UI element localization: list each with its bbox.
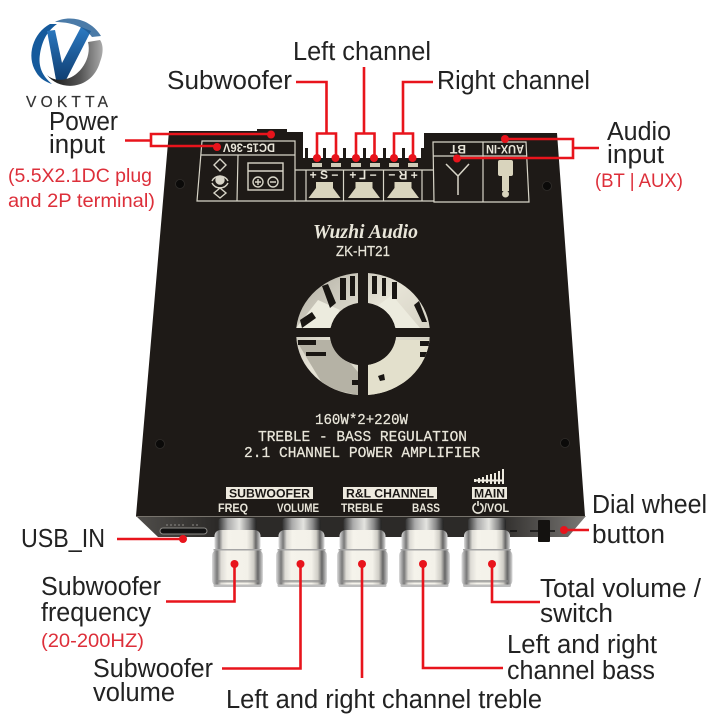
label: switch: switch — [540, 600, 613, 628]
callout: treble — [226, 560, 542, 714]
terminal comb — [305, 148, 424, 160]
callout: subwoofer volume — [93, 560, 304, 707]
knob: subwoofer volume — [276, 518, 327, 587]
board side — [136, 516, 586, 537]
AUX label: AUX-IN — [486, 142, 524, 156]
logo wordmark: VOKTTA — [26, 94, 109, 111]
icon: 2P terminal — [248, 163, 283, 190]
panel: audio input frame — [433, 142, 529, 202]
regulation text: TREBLE - BASS REGULATION — [258, 429, 467, 446]
label: volume: volume — [93, 679, 175, 707]
subwoofer terminal label: + S − — [310, 168, 338, 182]
note: plug spec: (5.5X2.1DC plug — [8, 165, 152, 187]
logo: VOKTTA — [26, 19, 109, 111]
callout: power input — [8, 108, 275, 212]
callout: dial wheel — [560, 491, 707, 549]
USB port — [160, 525, 207, 534]
left terminal label: + ⅃ − — [349, 168, 377, 182]
power label: DC15-36V — [223, 140, 275, 154]
callout: audio input — [453, 118, 683, 192]
right terminal label: + R − — [388, 168, 418, 182]
label: input: input — [607, 141, 664, 169]
icon: speaker S — [308, 182, 340, 198]
label: button: button — [592, 521, 665, 549]
label: audio: Audio — [607, 118, 671, 146]
board face — [136, 129, 585, 516]
label: subwoofer: Subwoofer — [41, 573, 161, 601]
TREBLE label: TREBLE — [341, 501, 383, 515]
FREQ label: FREQ — [218, 501, 248, 515]
knob: bass — [399, 518, 450, 587]
R&L channel tag: R&L CHANNEL — [346, 488, 434, 500]
BT label: BT — [449, 142, 466, 156]
callout: subwoofer — [167, 67, 340, 162]
callout: bass — [419, 560, 657, 685]
subwoofer tag: SUBWOOFER — [229, 488, 311, 500]
slots and dial wheel — [510, 520, 555, 542]
icon: DC jack — [212, 159, 228, 198]
callout: USB input: USB_IN — [21, 525, 105, 553]
VOL label — [473, 501, 509, 515]
callout: total volume — [488, 560, 702, 628]
callout: subwoofer frequency — [41, 560, 238, 652]
callout: subwoofer: Subwoofer — [167, 67, 293, 95]
icon: antenna — [446, 164, 469, 195]
callout: USB input — [21, 525, 187, 553]
callout: left channel — [293, 38, 431, 162]
panel: speaker output frame — [295, 168, 434, 201]
callout: right channel — [390, 67, 590, 162]
BASS label: BASS — [412, 501, 440, 515]
main tag: MAIN — [474, 488, 505, 500]
panel: power printed frame — [197, 140, 295, 201]
knob: main volume — [462, 518, 512, 587]
knob: subwoofer frequency — [212, 518, 263, 587]
note: terminal spec: and 2P terminal) — [8, 190, 155, 212]
label: dial wheel: Dial wheel — [592, 491, 707, 519]
label: power: Power — [49, 108, 118, 136]
power rating text: 160W*2+220W — [315, 412, 408, 429]
VOLUME label: VOLUME — [277, 501, 319, 515]
terminal pads — [312, 163, 418, 167]
label: subwoofer: Subwoofer — [93, 655, 213, 683]
callout: treble: Left and right channel treble — [226, 686, 542, 714]
brand script: Wuzhi Audio — [313, 221, 418, 243]
fan window — [296, 273, 430, 395]
icon: speaker R — [387, 182, 419, 198]
icon: volume bars — [474, 469, 504, 484]
label: left and right: Left and right — [507, 631, 657, 659]
channel text: 2.1 CHANNEL POWER AMPLIFIER — [244, 445, 480, 462]
knob: treble — [337, 518, 388, 587]
callout: left channel: Left channel — [293, 38, 431, 66]
label: input: input — [49, 131, 105, 159]
amplifier board — [136, 129, 586, 542]
screws — [156, 180, 570, 448]
callout: right channel: Right channel — [437, 67, 590, 95]
VOL label: /VOL — [484, 501, 509, 515]
icon: audio jack — [498, 160, 513, 198]
note: BT or AUX: (BT | AUX) — [595, 170, 683, 192]
icon: speaker L — [348, 182, 380, 198]
label: channel bass: channel bass — [507, 657, 655, 685]
model number: ZK-HT21 — [336, 244, 390, 260]
note: frequency range: (20-200HZ) — [41, 630, 144, 652]
label: total volume: Total volume / — [540, 575, 702, 603]
label: frequency: frequency — [41, 599, 151, 627]
